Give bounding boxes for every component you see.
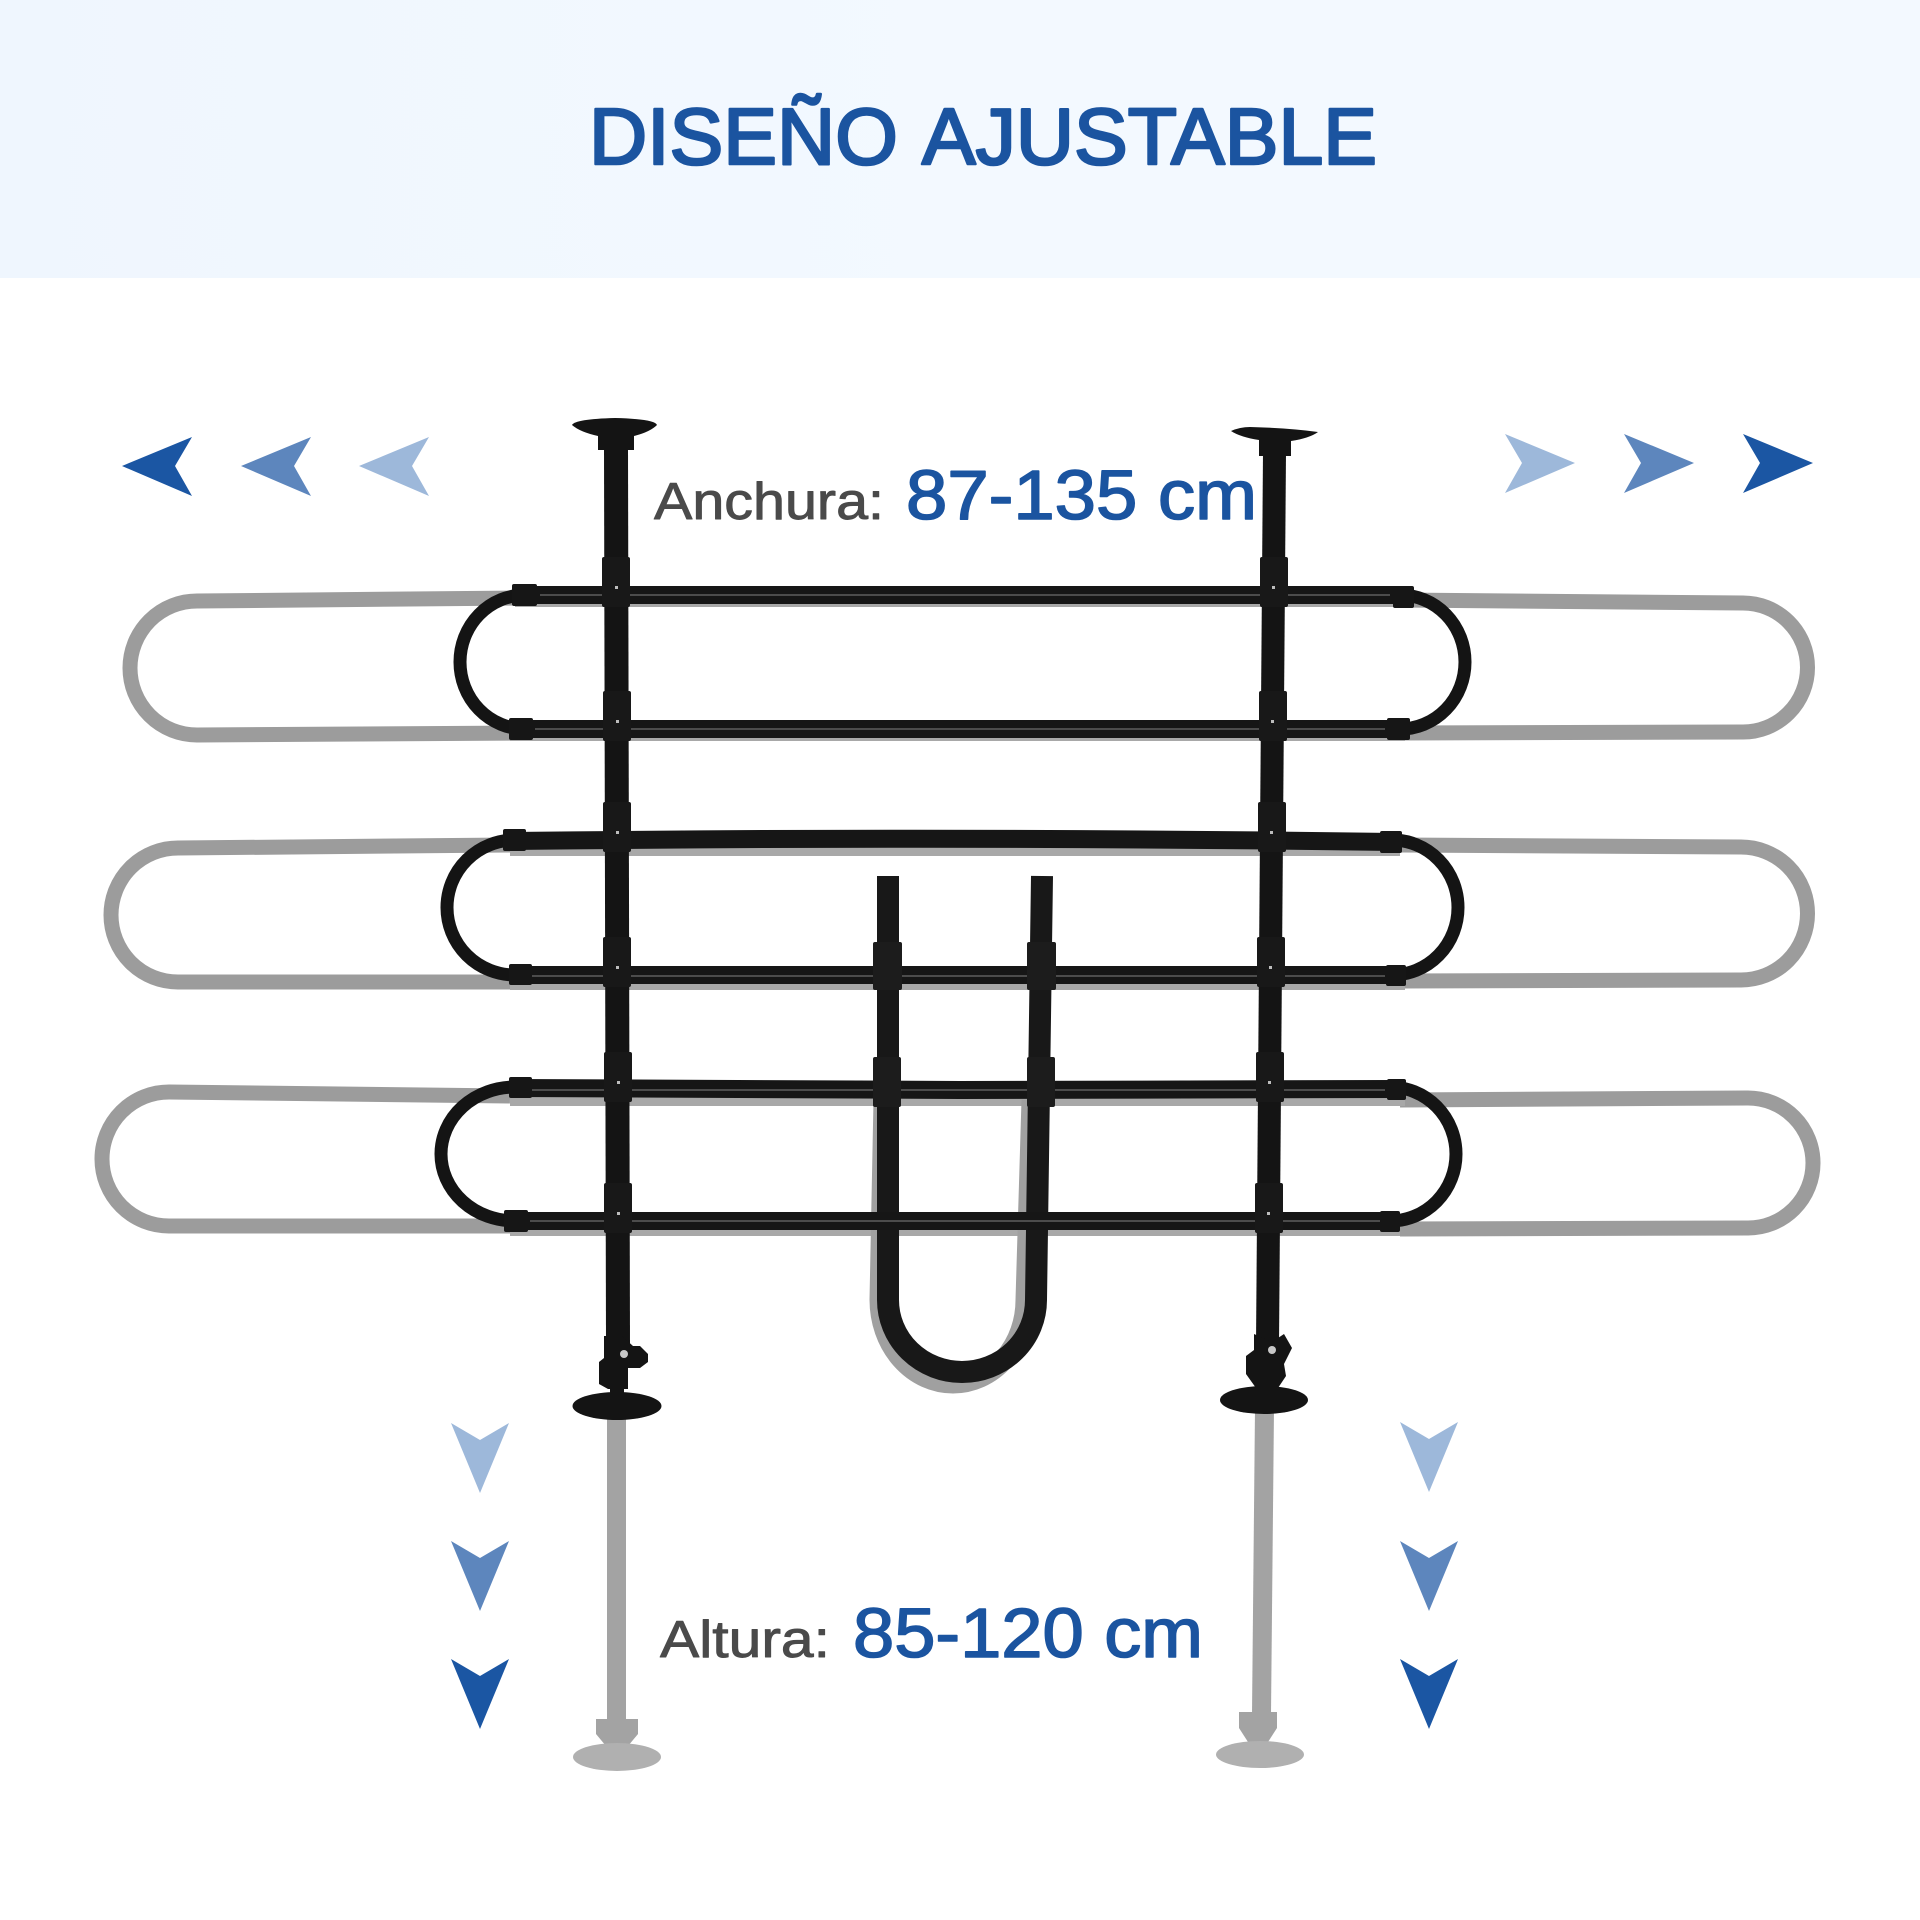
pole shaft: [604, 448, 630, 1345]
arrow mid: [451, 1541, 509, 1611]
end caps: [503, 584, 1414, 1232]
right pole: [1220, 427, 1318, 1414]
bar row 3 bottom: [510, 1212, 1395, 1230]
header band: [0, 0, 1920, 278]
arrow dark: [1400, 1659, 1458, 1729]
arrow dark: [1743, 434, 1813, 493]
arrow mid: [1400, 1541, 1458, 1611]
black loop row 3: [441, 1087, 1456, 1221]
height label: Altura:: [660, 1611, 830, 1669]
black U bracket: [888, 876, 1042, 1372]
width label: Anchura:: [654, 473, 884, 531]
title: DISEÑO AJUSTABLE: [589, 92, 1377, 181]
width label: [654, 456, 1257, 534]
ghost loop row 2 left: [111, 845, 510, 982]
arrows: height right: [1400, 1422, 1458, 1729]
width label: 87-135 cm: [906, 456, 1257, 534]
ghost loop row 1 left: [130, 598, 520, 735]
suction cup bottom: [1220, 1386, 1308, 1414]
black loop row 2: [447, 840, 1458, 975]
ghost loop row 1 right: [1400, 600, 1808, 733]
arrow light: [1505, 434, 1575, 493]
arrows: width left: [122, 437, 429, 496]
height knob: [599, 1336, 648, 1389]
ghost loop row 3 left: [102, 1092, 510, 1226]
bar row 2 top: [510, 830, 1395, 851]
ghost pole right: [1216, 1408, 1304, 1768]
pole clips left: [602, 557, 632, 1233]
bar row 1 bottom: [515, 720, 1400, 738]
pole clips right: [1255, 557, 1288, 1233]
left pole: [572, 418, 662, 1420]
black horizontal bars: [503, 584, 1414, 1232]
arrows: height left: [451, 1423, 509, 1729]
black adjustable loops: [441, 595, 1465, 1221]
pole shaft: [1256, 452, 1286, 1345]
arrow light: [451, 1423, 509, 1493]
arrow dark: [122, 437, 192, 496]
bar row 1 top: [518, 586, 1405, 604]
arrows: width right: [1505, 434, 1813, 493]
extended position ghost: grey bar loops: [102, 598, 1813, 1229]
arrow light: [1400, 1422, 1458, 1492]
arrow light: [359, 437, 429, 496]
arrow mid: [1624, 434, 1694, 493]
bar highlights: [530, 594, 1390, 1222]
height knob: [1246, 1334, 1292, 1388]
bar row 3 top: [515, 1079, 1400, 1099]
arrow dark: [451, 1659, 509, 1729]
ghost loop row 2 right: [1400, 845, 1808, 981]
arrow mid: [241, 437, 311, 496]
height label: 85-120 cm: [853, 1594, 1203, 1672]
height label: [660, 1594, 1203, 1672]
U bracket clips: [873, 942, 1056, 1107]
suction cup top: [1231, 427, 1318, 456]
ghost loop row 3 right: [1400, 1098, 1813, 1229]
suction cup top: [572, 418, 657, 450]
suction cup bottom: [572, 1392, 662, 1420]
ghost U bracket: [880, 1100, 1032, 1383]
ghost pole left: [573, 1412, 661, 1771]
black loop row 1: [460, 595, 1465, 729]
ghost bar shadows: [510, 600, 1410, 1229]
bar row 2 bottom: [515, 966, 1400, 984]
